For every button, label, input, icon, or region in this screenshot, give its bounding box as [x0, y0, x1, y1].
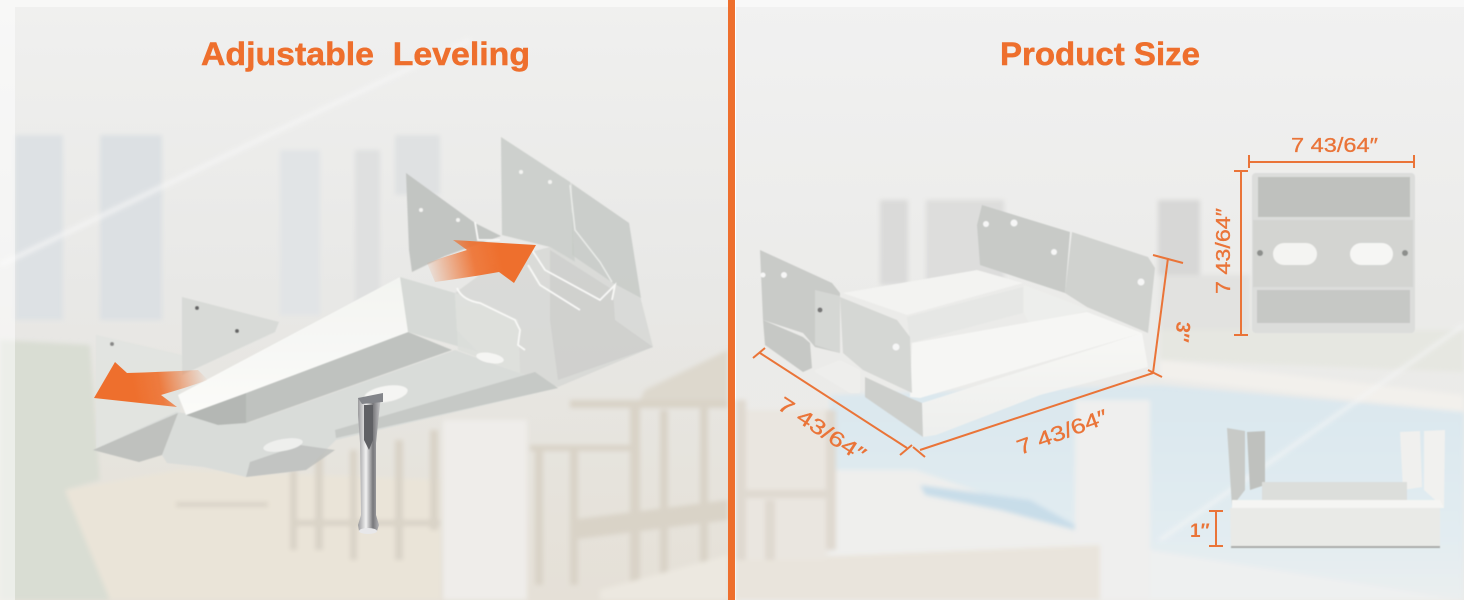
illustration: bracket 3/4 view: [760, 205, 1155, 437]
front plate: [840, 297, 912, 393]
slots in tray: [363, 382, 409, 406]
dimension label: top width: 7 43/64″: [1291, 135, 1378, 157]
dimension label: top height: 7 43/64″: [1213, 208, 1235, 294]
left plate: [760, 250, 840, 353]
ghost body right: [455, 182, 653, 387]
lower tray: [93, 350, 558, 477]
illustration: top view bracket: [1252, 173, 1415, 333]
dimension lines: bracket 3/4 view: [753, 255, 1183, 457]
side plate translucent: [400, 277, 478, 352]
arrow: right: [427, 240, 536, 283]
dimension label: depth: 7 43/64″: [773, 393, 870, 467]
heading: Product Size: Product Size: [1000, 36, 1200, 72]
panel: left background (deck scene): [0, 0, 728, 600]
feet: [763, 320, 812, 372]
plate: front left rear: [182, 297, 279, 375]
illustration: front view bracket: [1227, 428, 1445, 548]
heading: Adjustable Leveling: Adjustable Leveling: [201, 36, 530, 72]
rear step: [843, 270, 1023, 315]
dimension label: thickness: 1″: [1190, 521, 1210, 542]
illustration: adjustable bracket with bolt: [93, 137, 653, 477]
ghost plate far right back: [501, 137, 575, 262]
divider: [728, 0, 735, 600]
plate: rear middle: [406, 173, 501, 272]
back plate: [977, 205, 1070, 293]
icon: expansion bolt: [358, 393, 383, 534]
dimension line: thickness: [1209, 511, 1223, 546]
dimension label: width: 7 43/64″: [1014, 405, 1112, 460]
dimension lines: top view: [1234, 155, 1414, 335]
holes: [760, 220, 1144, 350]
arrow: left: [94, 362, 208, 407]
white contour lines on ghost plates: [457, 222, 615, 350]
main white tray: [910, 312, 1142, 398]
grey interior: [186, 393, 246, 425]
center tab: [815, 360, 860, 393]
slots: [1273, 243, 1317, 265]
plate: front left ghost: [96, 335, 182, 450]
dimension label: height: 3″: [1170, 320, 1194, 344]
white strip top face: [178, 277, 410, 415]
panel: right background (pool scene): [736, 0, 1464, 600]
